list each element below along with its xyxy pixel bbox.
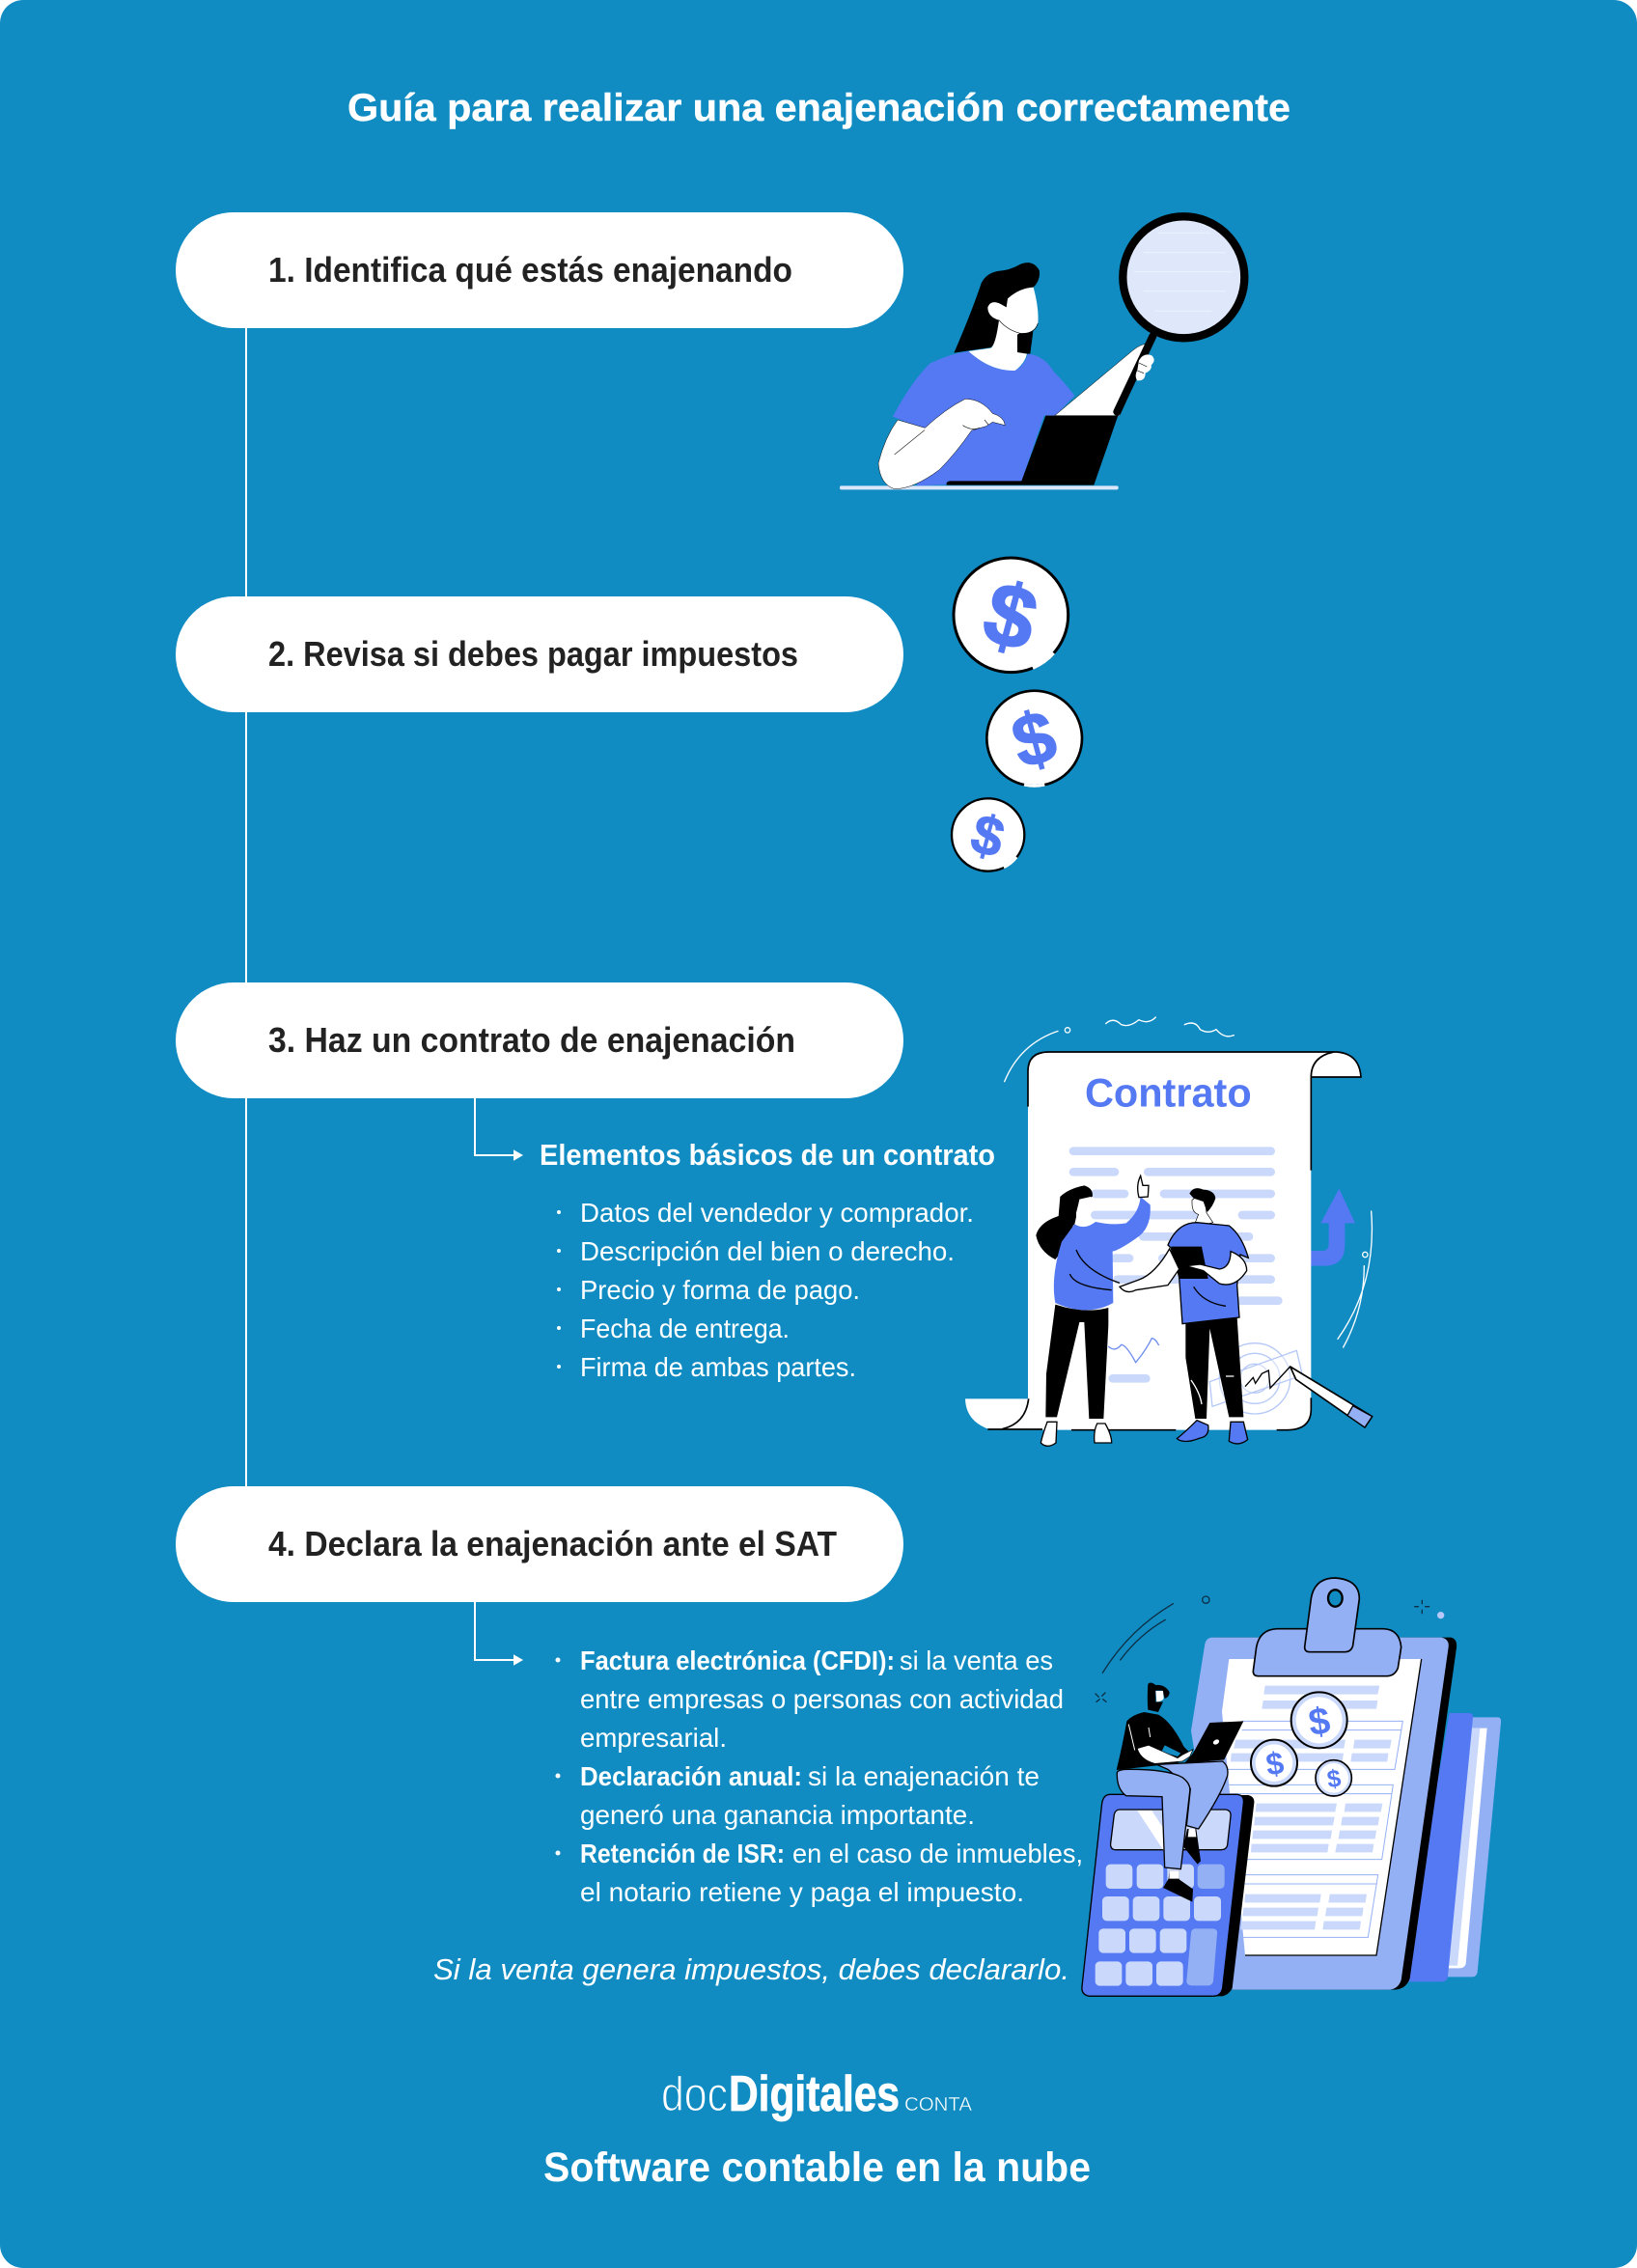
list: declaration options: generó una ganancia importante. [580,1800,975,1830]
coin large: $ [974,563,1047,671]
list: contract elements: Fecha de entrega. [580,1314,790,1343]
step 1 pill: 1. Identifica qué estás enajenando [268,250,792,290]
logo: docDigitales CONTA: CONTA [904,2094,973,2116]
clipboard coins: $ [1263,1745,1286,1783]
clipboard body [1191,1638,1457,1990]
clip [1253,1578,1401,1676]
form tables [1226,1721,1402,1937]
clipboard coins: $ [1325,1765,1343,1793]
list: contract elements: Firma de ambas partes. [580,1352,856,1382]
logo: docDigitales CONTA: Digitales [729,2066,900,2122]
coin small [952,798,1024,871]
step 2 pill [176,596,903,712]
timeline connector [245,323,247,1491]
step 3 pill [176,982,903,1098]
arrow: step 4 to declaration list [475,1601,521,1664]
decoration marks [1096,1596,1444,1701]
coin large [954,558,1068,673]
step 1 pill [176,212,903,328]
contract text lines [1069,1147,1283,1383]
coin medium: $ [1004,695,1065,785]
list: declaration options: en el caso de inmuebles, [792,1839,1083,1868]
closing note: Si la venta genera impuestos, debes declararlo. [433,1952,1069,1986]
logo: docDigitales CONTA [661,2066,973,2122]
arrow: step 3 to contract elements [475,1098,521,1159]
folders behind clipboard [1402,1713,1501,1981]
icon: dollar coins [952,558,1082,871]
logo: docDigitales CONTA: doc [661,2067,728,2121]
decoration strokes [1005,1017,1372,1347]
woman [1036,1175,1151,1446]
list: declaration options: Retención de ISR: [580,1839,785,1868]
step 4 pill [176,1486,903,1602]
man sitting with laptop [1117,1683,1243,1902]
list: contract elements: Datos del vendedor y comprador. [580,1198,974,1228]
stamp and signature [1209,1343,1302,1414]
illustration: clipboard, calculator and man with laptop [1082,1578,1501,1996]
coin small: $ [965,803,1011,871]
arrow behind contract [1310,1189,1355,1266]
list: declaration options: entre empresas o personas con actividad [580,1684,1064,1714]
title: Guía para realizar una enajenación correctamente [347,87,1290,129]
chart scribble [1108,1339,1159,1363]
list: declaration options: si la enajenación te [808,1761,1040,1791]
contract title: Contrato [1085,1070,1252,1116]
list: declaration options [556,1646,1083,1907]
step 2 pill: 2. Revisa si debes pagar impuestos [268,634,798,674]
coin medium [986,691,1082,786]
list: declaration options: el notario retiene y paga el impuesto. [580,1877,1024,1907]
list: declaration options: si la venta es [900,1646,1053,1675]
clipboard coins [1251,1692,1351,1796]
list: declaration options: Declaración anual: [580,1761,802,1791]
clipboard coins: $ [1306,1700,1333,1744]
contract paper [965,1052,1361,1430]
icon: woman with magnifying glass and laptop [840,216,1244,489]
man [1120,1188,1248,1444]
calculator [1082,1794,1254,1996]
step 4 pill: 4. Declara la enajenación ante el SAT [268,1524,837,1563]
heading: contract elements: Elementos básicos de un contrato [540,1138,995,1172]
list: declaration options: empresarial. [580,1723,727,1753]
list: contract elements [557,1198,974,1382]
list: declaration options: Factura electrónica (CFDI): [580,1646,895,1675]
step 3 pill: 3. Haz un contrato de enajenación [268,1020,795,1060]
list: contract elements: Descripción del bien o derecho. [580,1236,955,1266]
illustration: contract with two people shaking hands [965,1017,1373,1446]
list: contract elements: Precio y forma de pago. [580,1275,860,1305]
tagline: Software contable en la nube [543,2144,1091,2191]
pen [1290,1367,1373,1427]
